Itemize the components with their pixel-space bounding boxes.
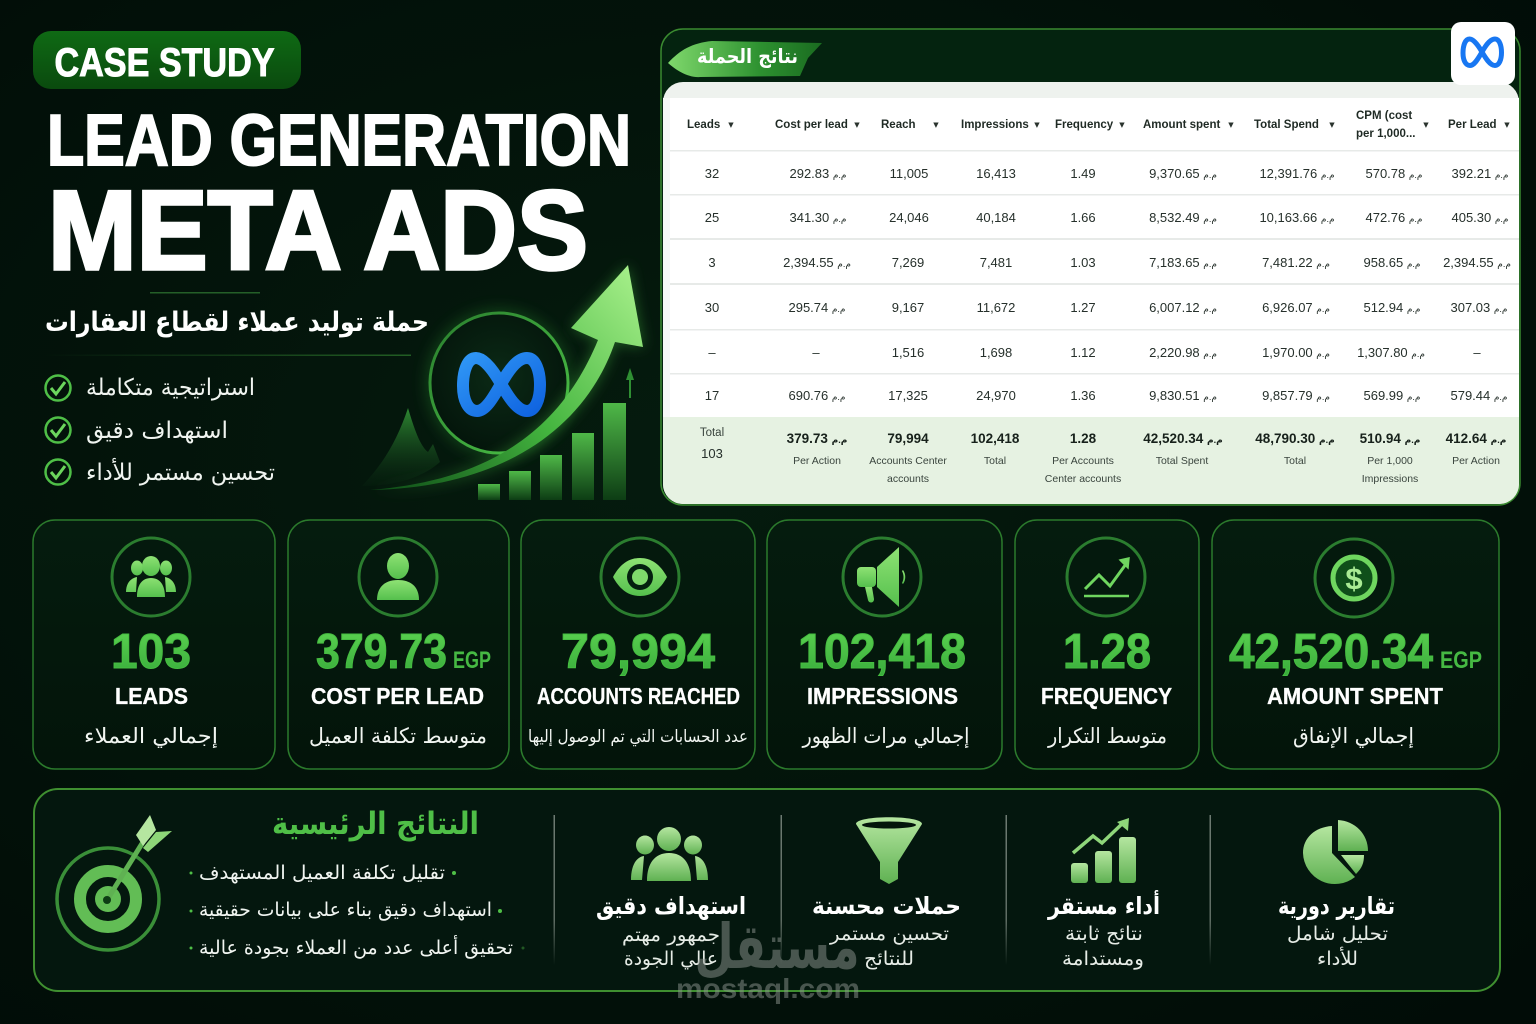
table totals: Total: [700, 427, 724, 439]
table header: Frequency: [1055, 119, 1114, 131]
checklist: [46, 375, 275, 486]
table totals: Total: [1284, 455, 1306, 467]
hero illustration: meta orb, growth bars and arrow: [362, 265, 643, 500]
card: frequency: متوسط التكرار: [1047, 724, 1167, 748]
heading: النتائج الرئيسية: [272, 806, 479, 842]
bullet list: استهداف دقيق بناء على بيانات حقيقية: [199, 899, 492, 921]
feature: optimized campaigns: للنتائج: [864, 948, 914, 970]
icon: megaphone: [857, 547, 905, 607]
table rows: 1,516: [892, 345, 924, 360]
table totals: 1.28: [1070, 431, 1097, 446]
table rows: 958.65 م.م: [1363, 255, 1421, 270]
table rows: 25: [705, 210, 719, 225]
table rows: 392.21 م.م: [1451, 166, 1509, 181]
card: accounts reached: ACCOUNTS REACHED: [537, 683, 740, 709]
table header: ▼: [1504, 121, 1510, 129]
table header: ▼: [728, 121, 734, 129]
table header: Leads: [687, 119, 720, 131]
table rows: 24,046: [889, 210, 929, 225]
table rows: [705, 166, 1511, 403]
growth arrow: [370, 265, 643, 490]
table rows: 9,830.51 م.م: [1149, 388, 1217, 403]
icon: meta logo badge: [1451, 22, 1515, 85]
table totals: 42,520.34 م.م: [1143, 431, 1223, 446]
table rows: 295.74 م.م: [788, 300, 846, 315]
icon: pie chart: [1303, 820, 1368, 884]
table rows: 1.36: [1070, 388, 1096, 403]
card: amount spent: AMOUNT SPENT: [1267, 683, 1443, 709]
table rows: –: [812, 345, 820, 360]
icon: bar chart with arrow: [1071, 818, 1136, 883]
table header: Reach: [881, 119, 916, 131]
table totals: Impressions: [1362, 473, 1418, 485]
table rows: 1,307.80 م.م: [1357, 345, 1425, 360]
table totals: 79,994: [887, 431, 929, 446]
bullet list: تقليل تكلفة العميل المستهدف: [199, 862, 445, 884]
feature: optimized campaigns: [812, 817, 961, 970]
card: leads: [33, 520, 275, 769]
card: accounts reached: 79,994: [561, 625, 715, 679]
title: META ADS: [48, 168, 588, 293]
table rows: 7,269: [892, 255, 924, 270]
panel: campaign results table: [661, 22, 1520, 505]
table rows: 569.99 م.م: [1363, 388, 1421, 403]
icon: funnel: [856, 817, 922, 884]
card: frequency: FREQUENCY: [1041, 683, 1172, 709]
card: cost per lead: [288, 520, 509, 769]
table header: Cost per lead: [775, 119, 848, 131]
feature: stable performance: [1047, 818, 1160, 970]
badge: case study: CASE STUDY: [54, 41, 275, 85]
feature: optimized campaigns: تحسين مستمر: [829, 923, 949, 945]
table rows: 292.83 م.م: [789, 166, 847, 181]
card: impressions: إجمالي مرات الظهور: [802, 724, 970, 749]
table header: ▼: [933, 121, 939, 129]
table rows: 570.78 م.م: [1365, 166, 1423, 181]
feature: precise targeting: جمهور مهتم: [622, 924, 720, 946]
table rows: 9,370.65 م.م: [1149, 166, 1217, 181]
table rows: 9,857.79 م.م: [1262, 388, 1330, 403]
check item 3: تحسين مستمر للأداء: [86, 458, 275, 486]
feature: precise targeting: [596, 827, 746, 970]
icon: dollar coin: [1333, 557, 1375, 599]
feature: precise targeting: استهداف دقيق: [596, 892, 746, 920]
feature: periodic reports: تقارير دورية: [1278, 892, 1395, 920]
table header: per 1,000...: [1356, 128, 1415, 140]
ribbon heading: [668, 41, 822, 77]
arrow glow: [370, 265, 643, 490]
table totals: Center accounts: [1045, 473, 1121, 485]
table rows: 7,481.22 م.م: [1262, 255, 1330, 270]
table header: ▼: [1119, 121, 1125, 129]
table rows: 690.76 م.م: [788, 388, 846, 403]
icon: meta logo: [463, 358, 540, 411]
table rows: 7,183.65 م.م: [1149, 255, 1217, 270]
table totals: 48,790.30 م.م: [1255, 431, 1335, 446]
table header: ▼: [1423, 121, 1429, 129]
table rows: 341.30 م.م: [789, 210, 847, 225]
check item 1: استراتيجية متكاملة: [86, 375, 255, 401]
ribbon heading: نتائج الحملة: [697, 44, 798, 68]
table totals: 379.73 م.م: [787, 431, 847, 446]
table totals: [700, 427, 1506, 485]
feature: stable performance: أداء مستقر: [1047, 890, 1160, 920]
table rows: 2,394.55 م.م: [1443, 255, 1511, 270]
table rows: 1,970.00 م.م: [1262, 345, 1330, 360]
bullet list: [190, 862, 524, 959]
table rows: 1,698: [980, 345, 1012, 360]
table totals: Per 1,000: [1367, 455, 1413, 467]
table totals: accounts: [887, 473, 929, 485]
title: [47, 101, 631, 293]
table rows: 405.30 م.م: [1451, 210, 1509, 225]
table rows: 1.03: [1070, 255, 1096, 270]
table rows: 24,970: [976, 388, 1016, 403]
card: leads: 103: [111, 625, 191, 679]
table rows: 1.49: [1070, 166, 1096, 181]
card: impressions: 102,418: [798, 625, 966, 679]
card: leads: LEADS: [115, 683, 188, 709]
card: cost per lead: 379.73: [316, 625, 447, 679]
icon: people: [631, 827, 708, 881]
table header: ▼: [1228, 121, 1234, 129]
watermark: mostaql: [676, 910, 860, 1004]
table rows: 2,220.98 م.م: [1149, 345, 1217, 360]
card: amount spent: [1212, 520, 1499, 769]
table header: Per Lead: [1448, 119, 1497, 131]
table totals: Per Action: [1452, 455, 1500, 467]
table rows: 8,532.49 م.م: [1149, 210, 1217, 225]
feature: periodic reports: تحليل شامل: [1287, 923, 1388, 945]
table rows: 3: [708, 255, 716, 270]
table header: Total Spend: [1254, 119, 1319, 131]
table rows: 6,926.07 م.م: [1262, 300, 1330, 315]
table rows: –: [1473, 345, 1481, 360]
table header: ▼: [854, 121, 860, 129]
table header: Amount spent: [1143, 119, 1220, 131]
icon: target with arrow: [57, 815, 172, 950]
table rows: 6,007.12 م.م: [1149, 300, 1217, 315]
table rows: 579.44 م.م: [1450, 388, 1508, 403]
table rows: 9,167: [892, 300, 924, 315]
table rows: 472.76 م.م: [1365, 210, 1423, 225]
table rows: 1.12: [1070, 345, 1096, 360]
card: leads: إجمالي العملاء: [84, 724, 218, 749]
table rows: 7,481: [980, 255, 1012, 270]
table totals: 103: [701, 446, 723, 461]
card: accounts reached: عدد الحسابات التي تم الوصول إليها: [528, 727, 748, 747]
badge: case study: [33, 31, 301, 89]
table rows: 307.03 م.م: [1450, 300, 1508, 315]
icon: trend line: [1084, 558, 1129, 596]
table rows: 16,413: [976, 166, 1016, 181]
table rows: 11,005: [890, 166, 928, 181]
table header: ▼: [1034, 121, 1040, 129]
card: impressions: IMPRESSIONS: [807, 683, 958, 709]
card: frequency: [1015, 520, 1199, 769]
icon: person: [377, 553, 419, 600]
table rows: 11,672: [977, 300, 1015, 315]
table totals: Per Accounts: [1052, 455, 1114, 467]
feature: stable performance: ومستدامة: [1062, 948, 1144, 970]
table header: Impressions: [961, 119, 1029, 131]
table totals: Total: [984, 455, 1006, 467]
card: amount spent: EGP: [1440, 647, 1482, 674]
card: frequency: 1.28: [1063, 625, 1151, 679]
table header: [687, 110, 1510, 140]
table rows: 17,325: [888, 388, 928, 403]
table rows: 2,394.55 م.م: [783, 255, 851, 270]
bullet list: تحقيق أعلى عدد من العملاء بجودة عالية: [199, 935, 513, 959]
card: amount spent: 42,520.34: [1229, 625, 1433, 679]
panel: key results: [34, 789, 1500, 991]
orb: [430, 313, 568, 453]
card: impressions: [767, 520, 1002, 769]
table rows: 32: [705, 166, 719, 181]
feature: optimized campaigns: حملات محسنة: [812, 892, 961, 920]
card: cost per lead: COST PER LEAD: [311, 683, 484, 709]
row lines: [670, 150, 1519, 374]
table rows: 512.94 م.م: [1363, 300, 1421, 315]
table totals: Total Spent: [1156, 455, 1208, 467]
table totals: Per Action: [793, 455, 841, 467]
card: cost per lead: متوسط تكلفة العميل: [309, 724, 487, 748]
table rows: 1.66: [1070, 210, 1096, 225]
table header: ▼: [1329, 121, 1335, 129]
card: amount spent: إجمالي الإنفاق: [1293, 724, 1414, 749]
table rows: 12,391.76 م.م: [1259, 166, 1335, 181]
card: cost per lead: EGP: [453, 647, 491, 674]
growth bars: [478, 403, 626, 500]
card: accounts reached: [521, 520, 755, 769]
table rows: 10,163.66 م.م: [1259, 210, 1335, 225]
title: LEAD GENERATION: [47, 101, 631, 181]
table header: CPM (cost: [1356, 110, 1412, 122]
table rows: 40,184: [976, 210, 1016, 225]
table rows: –: [708, 345, 716, 360]
subtitle: حملة توليد عملاء لقطاع العقارات: [45, 307, 429, 338]
table rows: 30: [705, 300, 719, 315]
check item 2: استهداف دقيق: [86, 418, 228, 444]
table totals: Accounts Center: [869, 455, 947, 467]
feature: periodic reports: [1278, 820, 1395, 970]
feature: stable performance: نتائج ثابتة: [1065, 923, 1143, 945]
icon: eye: [613, 558, 667, 596]
mountain glow: [362, 408, 440, 486]
icon: dollar coin: $: [1345, 561, 1363, 596]
feature: precise targeting: عالي الجودة: [624, 948, 718, 970]
feature: periodic reports: للأداء: [1317, 947, 1358, 970]
table totals: 412.64 م.م: [1446, 431, 1506, 446]
table rows: 17: [705, 388, 719, 403]
watermark: mostaql: mostaql.com: [676, 973, 860, 1004]
icon: group: [126, 556, 176, 597]
table rows: 1.27: [1070, 300, 1096, 315]
orb glow: [425, 308, 573, 458]
table totals: 102,418: [971, 431, 1020, 446]
table totals: 510.94 م.م: [1360, 431, 1420, 446]
watermark: mostaql: مستقل: [694, 910, 860, 983]
